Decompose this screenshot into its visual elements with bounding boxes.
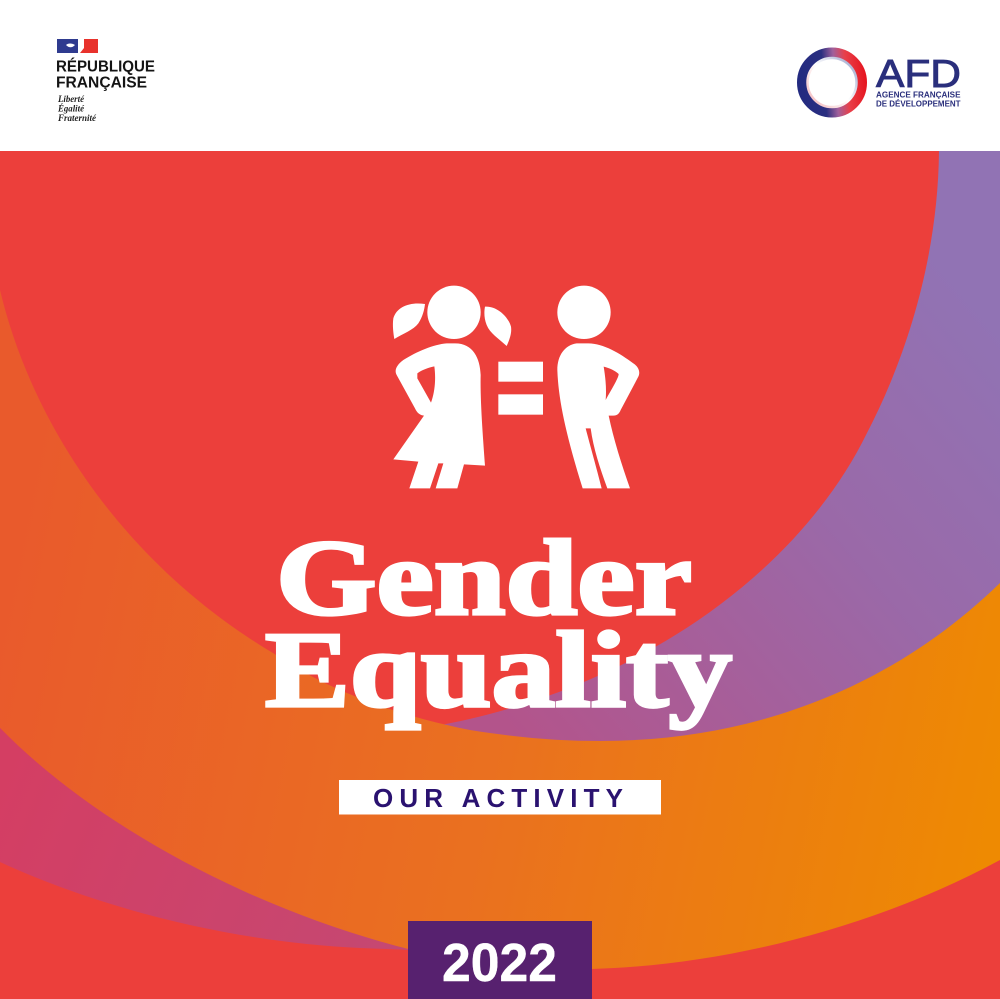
AFD full name: DE DÉVELOPPEMENT bbox=[876, 98, 960, 108]
subtitle label: our activity bbox=[339, 780, 661, 814]
wordmark: RÉPUBLIQUE bbox=[56, 58, 155, 76]
wordmark bbox=[56, 58, 155, 92]
header band bbox=[0, 0, 1000, 151]
icon: AFD ring bbox=[802, 52, 862, 112]
boy bbox=[557, 286, 639, 488]
title: Equality bbox=[265, 611, 732, 730]
title: Gender bbox=[276, 519, 692, 638]
background: pink arc bbox=[0, 728, 412, 950]
subtitle label: our activity: OUR ACTIVITY bbox=[373, 783, 623, 813]
wordmark: FRANÇAISE bbox=[56, 74, 147, 92]
year badge: 2022 bbox=[442, 933, 557, 993]
AFD wordmark: AFD bbox=[876, 53, 961, 96]
icon: French flag bbox=[57, 39, 98, 53]
girl bbox=[393, 286, 511, 488]
background: purple arc bbox=[430, 151, 1000, 800]
year badge bbox=[408, 921, 592, 999]
logo: République Française bbox=[56, 39, 155, 123]
AFD full name: AGENCE FRANÇAISE bbox=[876, 90, 961, 100]
icon: girl equals boy bbox=[393, 286, 639, 488]
AFD full name bbox=[876, 90, 961, 108]
motto: Égalité bbox=[57, 104, 85, 114]
motto: Fraternité bbox=[57, 113, 97, 123]
equals sign bbox=[498, 362, 543, 415]
motto: Liberté bbox=[57, 94, 85, 104]
logo: AFD bbox=[802, 52, 961, 112]
title bbox=[265, 519, 732, 730]
motto bbox=[57, 94, 97, 123]
background: orange arc bbox=[0, 290, 1000, 969]
